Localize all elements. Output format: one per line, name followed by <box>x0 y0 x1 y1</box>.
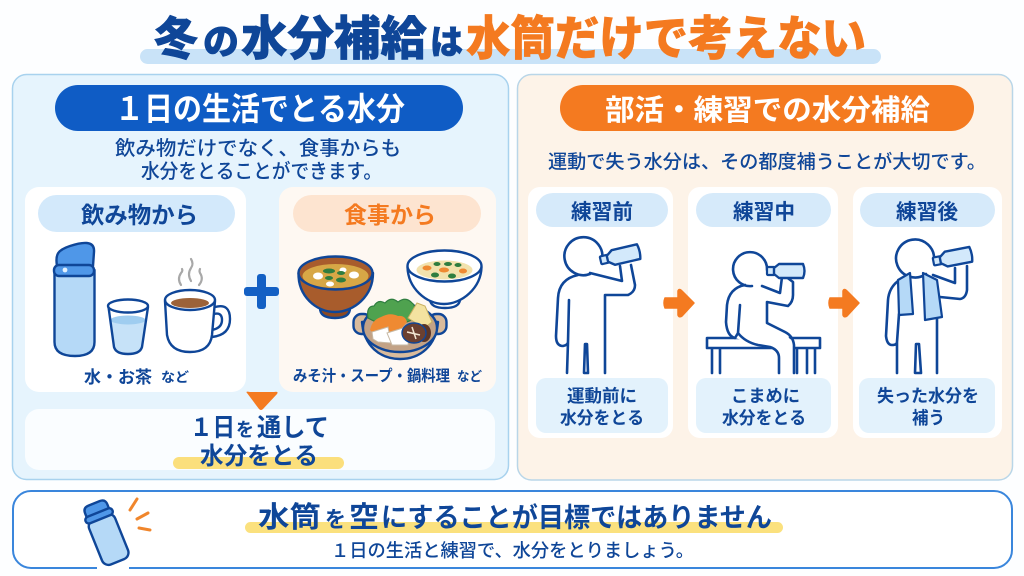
arrow: before to during <box>664 290 694 317</box>
icon: burst lines <box>130 499 150 530</box>
icon: plus <box>244 274 279 309</box>
drinks label <box>38 195 235 232</box>
drinks caption: など <box>161 370 190 385</box>
label: during <box>696 193 831 227</box>
icon: hot pot <box>354 299 446 359</box>
caption: after: 補う <box>912 408 945 428</box>
banner message: 水筒 <box>258 501 321 534</box>
title: の <box>203 21 239 62</box>
caption: during: 水分をとる <box>722 408 806 428</box>
result box <box>25 409 495 470</box>
bottom banner <box>13 491 1012 570</box>
title: は <box>430 24 463 62</box>
step: before practice <box>528 187 673 438</box>
result box: 通して <box>257 414 329 442</box>
food label <box>293 195 481 232</box>
panel: club practice hydration <box>518 74 1012 480</box>
drinks label: 飲み物から <box>81 202 198 228</box>
figure: drinker with towel <box>886 239 973 373</box>
food label: 食事から <box>344 202 436 228</box>
icon: soup bowl <box>408 250 482 308</box>
heading pill: daily hydration <box>55 85 463 131</box>
banner message: を <box>325 507 346 532</box>
result box: １日 <box>190 414 235 442</box>
banner message: にすることが目標ではありません <box>381 502 772 533</box>
intro text <box>115 137 401 183</box>
banner message: 空 <box>349 501 379 534</box>
food caption: など <box>457 369 482 384</box>
label: during: 練習中 <box>733 201 795 224</box>
intro text: 水分をとることができます。 <box>141 160 382 183</box>
result box: を <box>236 419 254 441</box>
caption: before <box>536 378 668 433</box>
caption: during <box>696 378 831 433</box>
icon: glass of water <box>108 300 148 354</box>
banner subtext: １日の生活と練習で、水分をとりましょう。 <box>331 540 694 561</box>
drinks caption <box>84 367 190 387</box>
caption: after: 失った水分を <box>877 386 979 406</box>
heading pill: practice hydration: 部活・練習での水分補給 <box>605 94 930 127</box>
title: 水分補給 <box>241 12 427 65</box>
card: food <box>279 187 496 392</box>
icon: coffee mug <box>165 259 230 352</box>
heading pill: practice hydration <box>560 85 974 131</box>
caption: after <box>859 378 995 433</box>
icon: miso soup <box>298 256 373 318</box>
caption: before: 運動前に <box>567 386 637 406</box>
panel: daily hydration <box>12 74 508 480</box>
arrow: down triangle <box>246 392 278 410</box>
step: after practice <box>853 187 1002 438</box>
title: 水筒だけで考えない <box>466 12 866 65</box>
label: before <box>536 193 668 227</box>
caption: during: こまめに <box>731 386 800 406</box>
title <box>140 12 881 65</box>
icon: flask <box>54 243 94 356</box>
figure: standing drinker <box>556 237 641 373</box>
title: 冬 <box>154 13 198 65</box>
label: before: 練習前 <box>571 201 633 224</box>
intro text: 運動で失う水分は、その都度補うことが大切です。 <box>548 151 986 173</box>
icon: tilted bottle <box>81 498 131 567</box>
food caption: みそ汁・スープ・鍋料理 <box>293 367 450 385</box>
step: during practice <box>688 187 838 438</box>
heading pill: daily hydration: １日の生活でとる水分 <box>115 91 405 127</box>
intro text: 飲み物だけでなく、食事からも <box>115 137 401 160</box>
arrow: during to after <box>829 290 859 317</box>
banner message <box>245 501 783 534</box>
result box: 水分をとる <box>200 443 318 470</box>
card: drinks <box>25 187 246 392</box>
drinks caption: 水・お茶 <box>84 367 152 387</box>
figure: seated drinker <box>707 252 820 373</box>
label: after <box>860 193 995 227</box>
caption: before: 水分をとる <box>560 408 644 428</box>
label: after: 練習後 <box>896 201 958 224</box>
